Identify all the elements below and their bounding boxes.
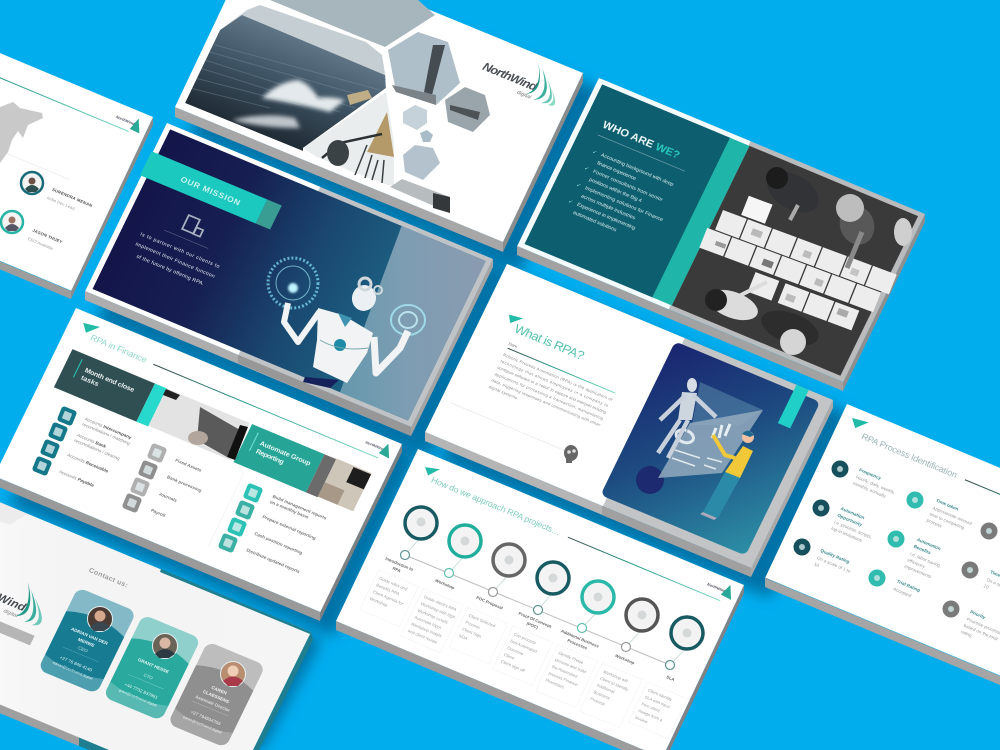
- item: automation opportunity: [830, 506, 879, 546]
- heading: How do we approach RPA projects…: [430, 475, 562, 537]
- card: Grant: GRANT HESSE: [137, 657, 170, 674]
- photo: sky behind sailing boat: [220, 5, 386, 80]
- slide: RPA in Finance: [0, 308, 402, 621]
- column text: reporting tasks: on a monthly basis: [269, 499, 310, 520]
- timeline nodes: [400, 550, 674, 670]
- column text: accounts tasks: Accounts Bank: [76, 432, 108, 449]
- step descriptions: Workshop with high: [420, 601, 457, 620]
- slide: who are we: [517, 78, 925, 391]
- bullet list: Accounting background with deep: [600, 152, 675, 188]
- logo: NorthWind digital: NorthWind: [480, 60, 540, 94]
- small logo: [363, 436, 395, 458]
- small logo: [705, 577, 737, 600]
- step descriptions: Client Sign: [461, 626, 483, 639]
- card: Adrian: +27 76 840 4140: [59, 655, 93, 673]
- item: time saved: [983, 569, 1000, 602]
- avatar: Surendra: [21, 172, 43, 194]
- photo: tiny hexagon: [420, 130, 433, 142]
- bullet list: Experience in implementing: [576, 202, 636, 231]
- paragraph: data, triggering responses and communicating with other: [491, 378, 602, 428]
- heading: RPA in Finance: [89, 333, 149, 365]
- bullet list: Implementing solutions for Finance: [584, 185, 664, 223]
- step descriptions: bed Automated: [510, 638, 539, 654]
- avatar: Jason: [1, 211, 23, 233]
- column text: reporting tasks: Distribute updated reports: [246, 548, 301, 574]
- team member: Jason: JASON THUEY: [32, 228, 63, 244]
- mission statement: of the future by offering RPA.: [135, 254, 205, 287]
- card: Grant: [103, 614, 201, 721]
- step descriptions: [362, 576, 675, 737]
- item: time taken: process: [926, 518, 944, 529]
- bullet list: ✓: [591, 149, 598, 156]
- step descriptions: Client: [503, 652, 516, 661]
- illustration: robot, chart screen and person: [636, 378, 763, 520]
- step labels: Additional Business: [560, 629, 600, 649]
- step labels: Proof Of Concept: [518, 611, 553, 629]
- column text: accounts tasks: reconciliations / matching: [81, 422, 131, 446]
- bullet list: ✓: [567, 199, 574, 206]
- bullet list: ✓: [575, 182, 582, 189]
- photo: sea: [185, 15, 386, 151]
- mission statement: Is to partner with our clients to: [139, 232, 221, 270]
- map: [0, 102, 43, 163]
- heading: What is RPA?: [512, 321, 587, 363]
- team member: Jason: [27, 227, 63, 253]
- team member: Surendra: [46, 186, 93, 217]
- banner: automate group reporting: [234, 424, 336, 497]
- card: Caren: CLAESSENS: [202, 689, 230, 704]
- bullet list: Former consultants from senior: [592, 169, 664, 203]
- card: Grant: CTO: [143, 673, 154, 681]
- icons: accounts tasks: [32, 406, 77, 476]
- item: trial rating: Accepted: [892, 586, 913, 598]
- mission statement: [129, 232, 221, 290]
- item: priority: Priority: [969, 609, 987, 620]
- step descriptions: Process: [590, 696, 606, 706]
- item: automation opportunity: Opportunity: [837, 513, 863, 527]
- heading: RPA Process Identification: [860, 432, 959, 480]
- column text: accounts tasks: [58, 416, 134, 493]
- step descriptions: Process: [465, 620, 481, 630]
- step descriptions: invoice: [634, 715, 649, 725]
- logo: NorthWind digital: [477, 60, 555, 106]
- item: time taken: Time taken: [935, 498, 960, 512]
- item: automation benefits: [904, 537, 949, 581]
- step descriptions: Benefits RPA: [375, 582, 401, 596]
- photo: paper sheets on table: [690, 187, 905, 338]
- column text: accounts tasks: reconciliations / clearing: [73, 438, 121, 461]
- item: automation benefits: Automation: [916, 537, 942, 551]
- step labels: Workshop: [614, 653, 636, 666]
- step descriptions: from client: [641, 701, 662, 714]
- item: automation benefits: efficiency: [906, 557, 927, 570]
- item: frequency: monthly, annually: [852, 481, 888, 499]
- photo: sail hexagon: [388, 32, 460, 105]
- robot illustration: [268, 258, 425, 388]
- heading: WHO ARE WE?: [600, 119, 682, 162]
- item: quality rating: Quality Rating: [820, 548, 851, 564]
- item: automation benefits: improvements: [904, 564, 933, 579]
- column text: accounts tasks: Accounts Receivable: [66, 452, 110, 474]
- mission banner: OUR MISSION: [179, 175, 242, 207]
- slide: cover: [175, 0, 583, 252]
- slide: how do we approach RPA projects: [336, 449, 744, 750]
- column text: reporting tasks: Cash position reporting: [254, 531, 304, 555]
- photo: laptop background: [148, 388, 249, 460]
- item: automation opportunity: i.e. process, scripts,: [833, 520, 873, 540]
- step descriptions: NDA: [458, 633, 469, 641]
- column text: accounts tasks: Accounts Intercompany: [84, 416, 133, 440]
- item: priority: rating: [960, 629, 973, 638]
- step descriptions: Workshop will: [602, 669, 629, 684]
- step descriptions: and client review: [407, 628, 439, 645]
- item: automation benefits: Benefits: [913, 544, 932, 555]
- step descriptions: Outcome: [506, 645, 525, 657]
- paragraph: configure software or a 'robot' to capture and interpret existing: [497, 365, 608, 415]
- card: Grant: +44 7732 837861: [124, 682, 159, 700]
- team member: Surendra: India Dev Lead: [46, 195, 76, 211]
- banner: month end close tasks: tasks: [80, 375, 100, 388]
- step descriptions: Client Identify: [647, 688, 674, 702]
- column text: reporting tasks: Build management reports: [272, 494, 328, 521]
- card: Adrian: CEO: [77, 645, 89, 654]
- column text: processing tasks: [150, 458, 211, 526]
- logo: NorthWind digital: [0, 579, 47, 645]
- photo: boat deck: [303, 92, 394, 185]
- step descriptions: Client to Identify: [599, 676, 630, 692]
- step descriptions: the Automated: [551, 664, 579, 679]
- logo swoosh: [16, 582, 42, 625]
- timeline icons: [416, 518, 692, 638]
- step descriptions: Client sign off: [500, 659, 526, 673]
- logo: NorthWind digital: digital: [516, 90, 533, 101]
- step descriptions: Client Agenda for: [372, 589, 405, 606]
- step labels: Processes: [567, 638, 589, 651]
- blue illustration panel: [600, 341, 820, 556]
- bullet list: positions within the Big 4: [588, 177, 643, 204]
- photo: meeting: [318, 459, 372, 511]
- bullet list: ✓: [583, 166, 590, 173]
- step labels: POC Proposal: [475, 595, 504, 610]
- item: time taken: time to completing: [929, 512, 966, 530]
- step labels: (POC): [526, 621, 540, 630]
- banner: automate group reporting: Reporting: [254, 448, 285, 466]
- slide: map and team: [0, 0, 153, 299]
- step descriptions: Processes: [545, 677, 565, 689]
- item: time saved: 10: [983, 583, 990, 590]
- step descriptions: Client Selected: [468, 613, 497, 629]
- item: frequency: Frequency: [858, 467, 882, 481]
- photo: small hexagon middle: [403, 105, 427, 130]
- mission banner: [140, 151, 282, 230]
- banner: month end close tasks: [54, 349, 167, 427]
- slide: our mission: [84, 122, 493, 436]
- card: Adrian: [38, 587, 137, 694]
- card: Adrian: MERWE: [77, 637, 95, 648]
- robot scene background: [92, 129, 486, 421]
- item: time taken: [926, 498, 977, 539]
- logo triangle: [506, 313, 523, 327]
- card: Caren: CAREN: [211, 685, 228, 696]
- small logo: NorthWind: [365, 440, 385, 452]
- slide: what is RPA: Dark: [508, 341, 519, 349]
- timeline connectors: [405, 537, 687, 665]
- icons: reporting tasks: [218, 483, 263, 553]
- column text: processing tasks: Payroll: [150, 508, 166, 518]
- photo: wave foam: [232, 80, 345, 128]
- step labels: [382, 555, 676, 687]
- column text: processing tasks: Bank processing: [166, 474, 203, 493]
- step descriptions: Business: [593, 689, 611, 700]
- paragraph: [487, 352, 614, 434]
- item: trial rating: Trial Rating: [896, 579, 921, 593]
- step descriptions: process Finance: [548, 671, 579, 687]
- mission statement: implement their Finance function: [134, 242, 216, 280]
- paragraph: applications for processing a transaction, manipulating: [494, 371, 605, 421]
- banner: automate group reporting: Automate Group: [258, 440, 312, 467]
- team member: Jason: CEO Australia: [27, 236, 54, 251]
- item: trial rating: [892, 579, 921, 601]
- logo triangle: [849, 416, 869, 432]
- icon: head with gears: [564, 445, 578, 463]
- photo: hands on laptop: [163, 389, 248, 460]
- step descriptions: Assign from a: [638, 708, 664, 723]
- card: Adrian: ADRIAN VAN DER: [70, 626, 109, 646]
- column text: processing tasks: Fixed Assets: [174, 458, 203, 473]
- slide: RPA process identification: [765, 404, 1000, 723]
- card: Caren: caren@northwind.digital: [182, 715, 222, 735]
- step labels: RPA: [392, 566, 402, 573]
- paragraph: digital systems.: [488, 384, 519, 401]
- slide: contact us: [0, 496, 313, 750]
- item: quality rating: [813, 548, 855, 580]
- photo: bottom hexagon: [390, 179, 450, 213]
- teal tab: [778, 385, 809, 428]
- item: quality rating: On a scale of 1 to: [816, 555, 852, 574]
- step descriptions: Automate Input: [414, 615, 443, 630]
- step labels: Introduction to: [385, 556, 415, 572]
- logo triangle: [80, 321, 100, 337]
- item: automation opportunity: Automation: [840, 506, 866, 520]
- photo: small hexagon right: [445, 87, 490, 132]
- step descriptions: Workshop: [369, 596, 389, 608]
- step descriptions: Additional: [596, 683, 615, 694]
- slide: map and team: NorthWind: [115, 115, 136, 126]
- step descriptions: Can process: [513, 632, 537, 645]
- card: Caren: Associate Director: [194, 694, 231, 713]
- step descriptions: Guide roles and: [379, 576, 409, 592]
- step labels: SLA: [666, 674, 675, 682]
- item: quality rating: 10: [813, 562, 820, 568]
- timeline circles: [405, 507, 703, 649]
- item: time taken: Approximate amount: [932, 505, 974, 526]
- step descriptions: Workshop Levels: [417, 608, 449, 625]
- portraits: [88, 606, 246, 686]
- column text: accounts tasks: Accounts Payable: [58, 469, 95, 488]
- item: priority: [960, 609, 1000, 649]
- photo: top sail hexagon: [270, 0, 435, 47]
- step descriptions: Identify Phase: [557, 650, 585, 665]
- photo: lower hexagon: [403, 145, 440, 180]
- teal text panel: [524, 84, 731, 298]
- icons: process dots: [794, 460, 998, 618]
- team member: Surendra: SURENDRA MENAN: [51, 187, 93, 208]
- card: Adrian: adrian@northwind.digital: [52, 661, 93, 681]
- small logo: NorthWind: [706, 582, 727, 594]
- bullet list: [563, 149, 680, 248]
- accent band: [652, 138, 750, 305]
- logo triangle: [422, 464, 440, 478]
- photo: four people around table: [704, 163, 912, 355]
- step descriptions: Workshop Insight: [410, 621, 443, 639]
- photo background: [672, 146, 918, 376]
- card: Caren: +27 794504703: [190, 710, 222, 726]
- card: Grant: grant@northwind.digital: [118, 688, 158, 708]
- banner: month end close tasks: Month end close: [83, 367, 135, 394]
- logo: NorthWind digital: digital: [2, 608, 19, 620]
- heading: Contact us:: [87, 567, 129, 589]
- step descriptions: SLA with input: [644, 694, 672, 710]
- column text: reporting tasks: [246, 494, 328, 574]
- column text: processing tasks: Journals: [158, 491, 178, 503]
- bullet list: automated solutions: [572, 210, 618, 233]
- bullet list: finance experience: [596, 161, 637, 182]
- slide: what is RPA: [425, 264, 833, 577]
- item: frequency: [852, 467, 899, 501]
- icons: processing tasks: [122, 443, 167, 513]
- paragraph: Robotic Process Automation (RPA) is the application of: [502, 352, 614, 402]
- paragraph: technology that allows employees in a company to: [500, 359, 610, 408]
- item: automation opportunity: log-in limitations: [830, 526, 864, 543]
- step descriptions: Guide client's RPA: [423, 594, 458, 612]
- icon: document calculator: [182, 215, 207, 237]
- column text: reporting tasks: Prepare external reporting: [262, 514, 317, 541]
- item: frequency: Hourly, daily, weekly,: [855, 474, 896, 495]
- bullet list: across multiple industries: [580, 194, 637, 221]
- card: Caren: [170, 644, 263, 746]
- item: priority: based on the total: [963, 623, 999, 641]
- right translucent panel: [324, 226, 486, 421]
- step labels: Workshop: [434, 578, 456, 590]
- step descriptions: process and build: [554, 657, 588, 675]
- item: automation benefits: i.e. labor saving,: [909, 551, 942, 569]
